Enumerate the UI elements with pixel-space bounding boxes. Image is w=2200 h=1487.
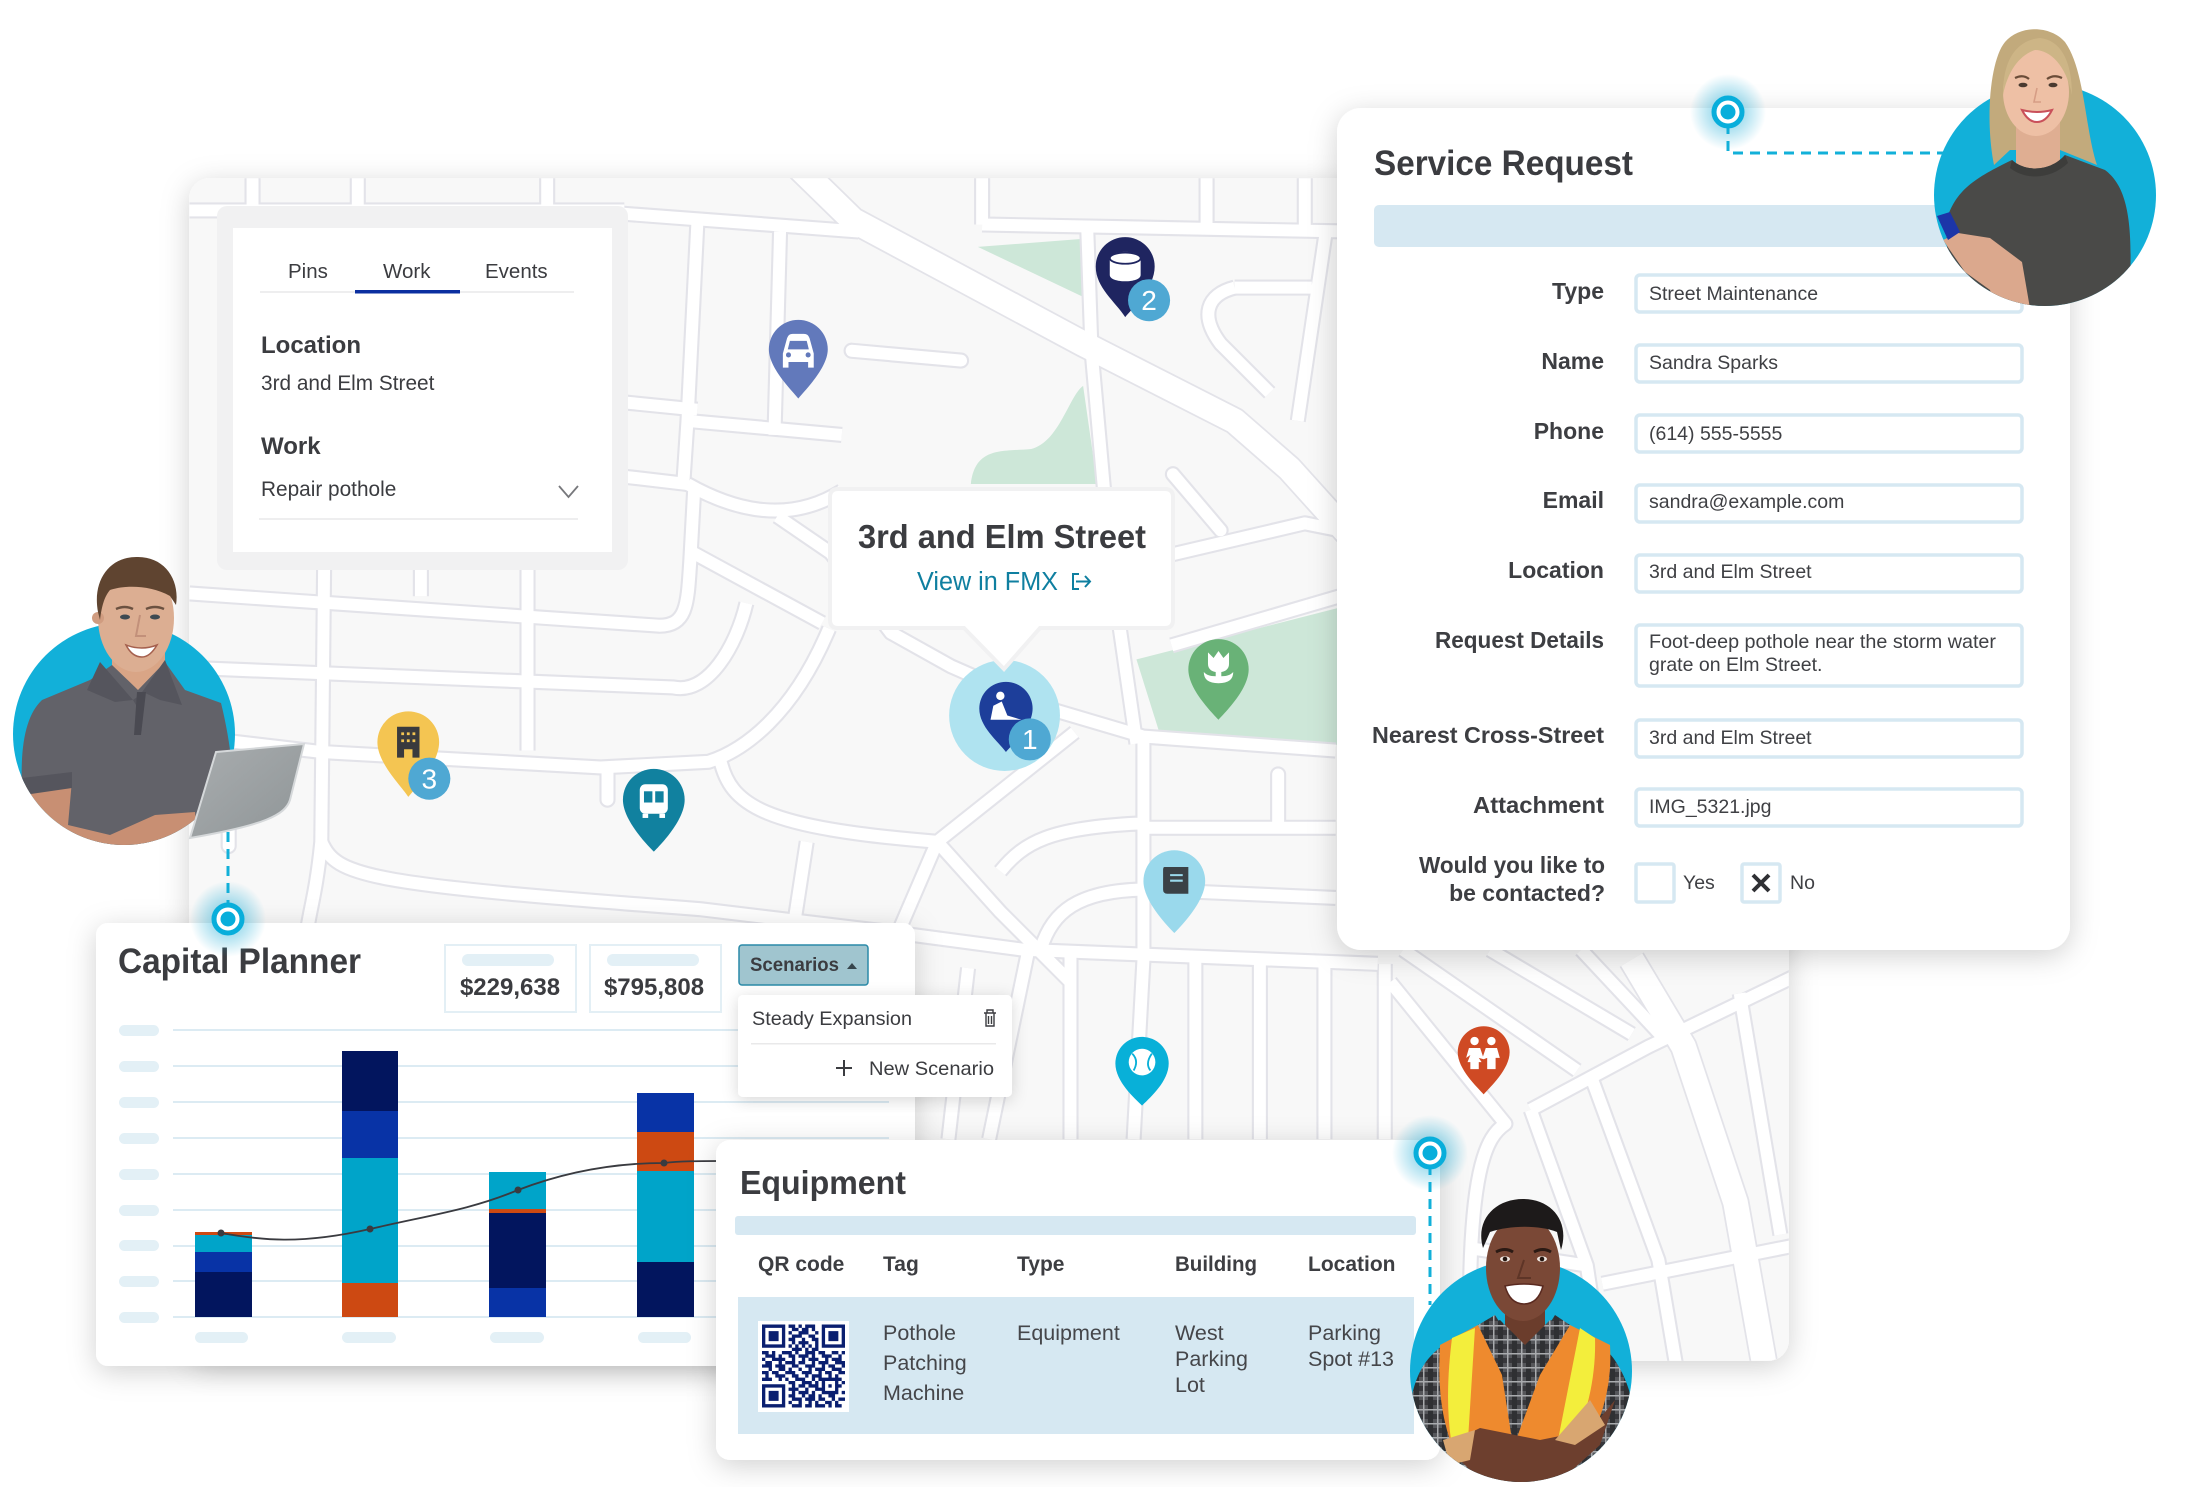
man head — [92, 557, 177, 672]
field: contact preference: be contacted? — [1449, 880, 1605, 906]
stat box 2 — [590, 945, 721, 1012]
tabs: Events — [485, 260, 548, 283]
map streets — [189, 161, 1800, 1368]
pin: bus — [623, 769, 685, 852]
y axis labels — [119, 1025, 159, 1323]
pin: database with badge 2 — [1096, 237, 1170, 321]
field: type: Type — [1552, 278, 1604, 304]
table header: Building — [1175, 1253, 1257, 1276]
header bar — [1374, 205, 1974, 247]
location cell: Parking — [1308, 1321, 1381, 1345]
table header: QR code — [758, 1253, 844, 1276]
pin: ball field — [1115, 1037, 1169, 1106]
bar 1 — [195, 1232, 252, 1317]
tabs: Work — [383, 260, 431, 283]
field: email — [1543, 485, 2022, 522]
table header: Type — [1017, 1253, 1064, 1276]
pin: database with badge 2: 2 — [1141, 285, 1157, 316]
stat box 2: $795,808 — [604, 974, 704, 1001]
tabs: Pins — [288, 260, 328, 283]
field: email: Email — [1543, 487, 1604, 513]
avatar: man with laptop — [13, 557, 304, 860]
node: service request — [1690, 74, 1766, 150]
field: contact preference: Yes — [1683, 872, 1715, 894]
tag cell: Machine — [883, 1381, 964, 1405]
avatar: worker in safety vest — [1410, 1199, 1632, 1487]
heading: Capital Planner — [118, 942, 361, 981]
table header — [758, 1253, 1396, 1276]
field: phone — [1534, 415, 2022, 452]
field: type: Street Maintenance — [1649, 283, 1818, 305]
location field: Location — [261, 332, 361, 359]
field: name — [1541, 345, 2022, 382]
location field — [261, 332, 435, 395]
field: nearest cross-street: 3rd and Elm Street — [1649, 727, 1812, 749]
work field: Repair pothole — [261, 478, 396, 501]
field: attachment: IMG_5321.jpg — [1649, 796, 1772, 818]
scenarios button — [739, 945, 868, 985]
pin: selected work order with halo and badge 1 — [949, 660, 1060, 771]
connector: equipment to worker — [1428, 1165, 1432, 1305]
building cell: Parking — [1175, 1347, 1248, 1371]
connector: service request to woman — [1728, 124, 1945, 153]
heading: Service Request — [1374, 144, 1633, 183]
building cell — [1175, 1321, 1248, 1397]
field: contact preference: Would you like to — [1419, 852, 1605, 878]
tag cell — [883, 1321, 967, 1405]
pin: park tulip — [1188, 639, 1249, 720]
tag cell: Patching — [883, 1351, 967, 1375]
pin: selected work order with halo and badge 1: 1 — [1022, 724, 1038, 755]
table header: Tag — [883, 1253, 919, 1276]
worker head — [1481, 1199, 1563, 1321]
connector: man to capital planner — [226, 832, 230, 905]
bar 4 — [637, 1093, 694, 1317]
field: request details: grate on Elm Street. — [1649, 654, 1822, 676]
node: equipment — [1392, 1115, 1468, 1191]
field: location: Location — [1508, 557, 1604, 583]
field: nearest cross-street: Nearest Cross-Street — [1372, 722, 1604, 748]
icon: trash — [984, 1010, 996, 1026]
tag cell: Pothole — [883, 1321, 956, 1345]
pin: school children — [1458, 1026, 1510, 1094]
dropdown: scenarios menu — [738, 995, 1012, 1097]
work field — [259, 433, 578, 520]
table row — [738, 1297, 1414, 1434]
map parks — [971, 239, 1340, 745]
field: nearest cross-street — [1372, 720, 2022, 757]
x axis labels — [195, 1332, 691, 1343]
icon: open link — [1073, 574, 1090, 589]
field: phone: Phone — [1534, 418, 1604, 444]
location cell — [1308, 1321, 1394, 1371]
avatar: woman with phone — [1934, 29, 2156, 320]
field: attachment: Attachment — [1473, 792, 1604, 818]
trend line — [218, 1160, 720, 1240]
tabs — [260, 260, 574, 294]
dropdown: scenarios menu: New Scenario — [869, 1058, 994, 1080]
field: type — [1552, 275, 2022, 312]
pin: building with badge 3: 3 — [422, 763, 437, 794]
heading: Equipment — [740, 1164, 906, 1201]
bar 2 — [342, 1051, 398, 1317]
building cell: West — [1175, 1321, 1224, 1345]
bar 3 — [489, 1172, 546, 1317]
type cell: Equipment — [1017, 1321, 1120, 1345]
field: attachment — [1473, 789, 2022, 826]
node: capital planner — [190, 881, 266, 957]
pin: vehicle — [769, 320, 828, 398]
panel: service request form — [1337, 108, 2070, 950]
panel: equipment table — [716, 1140, 1440, 1460]
field: name: Sandra Sparks — [1649, 352, 1778, 374]
field: phone: (614) 555-5555 — [1649, 423, 1783, 445]
chart: stacked bars with trend line — [119, 1025, 889, 1343]
field: location — [1508, 555, 2022, 592]
field: request details: Foot-deep pothole near the storm water — [1649, 631, 1997, 653]
QR code — [758, 1321, 849, 1412]
pin: building with badge 3 — [377, 711, 450, 800]
header bar — [735, 1216, 1416, 1235]
panel: capital planner — [96, 923, 915, 1366]
pin: book — [1143, 850, 1205, 933]
callout: location popup: 3rd and Elm Street — [858, 518, 1146, 555]
map panel — [189, 161, 1800, 1368]
table header: Location — [1308, 1253, 1396, 1276]
gridlines — [173, 1030, 889, 1317]
location cell: Spot #13 — [1308, 1347, 1394, 1371]
location field: 3rd and Elm Street — [261, 372, 435, 395]
scenarios button: Scenarios — [750, 954, 839, 976]
laptop — [190, 744, 304, 838]
callout: location popup: View in FMX — [917, 568, 1058, 596]
work field: Work — [261, 433, 321, 460]
field: name: Name — [1541, 348, 1604, 374]
callout: location popup — [830, 489, 1173, 669]
field: request details — [1435, 625, 2022, 686]
woman head — [2003, 38, 2072, 136]
dropdown: scenarios menu: Steady Expansion — [752, 1008, 912, 1030]
stat box 1 — [445, 945, 576, 1012]
panel: work details — [217, 206, 628, 570]
icon: plus — [836, 1060, 852, 1076]
field: request details: Request Details — [1435, 627, 1604, 653]
field: email: sandra@example.com — [1649, 491, 1844, 513]
field: contact preference — [1419, 852, 1815, 906]
stat box 1: $229,638 — [460, 974, 560, 1001]
field: contact preference: No — [1790, 872, 1815, 894]
field: location: 3rd and Elm Street — [1649, 561, 1812, 583]
building cell: Lot — [1175, 1373, 1205, 1397]
